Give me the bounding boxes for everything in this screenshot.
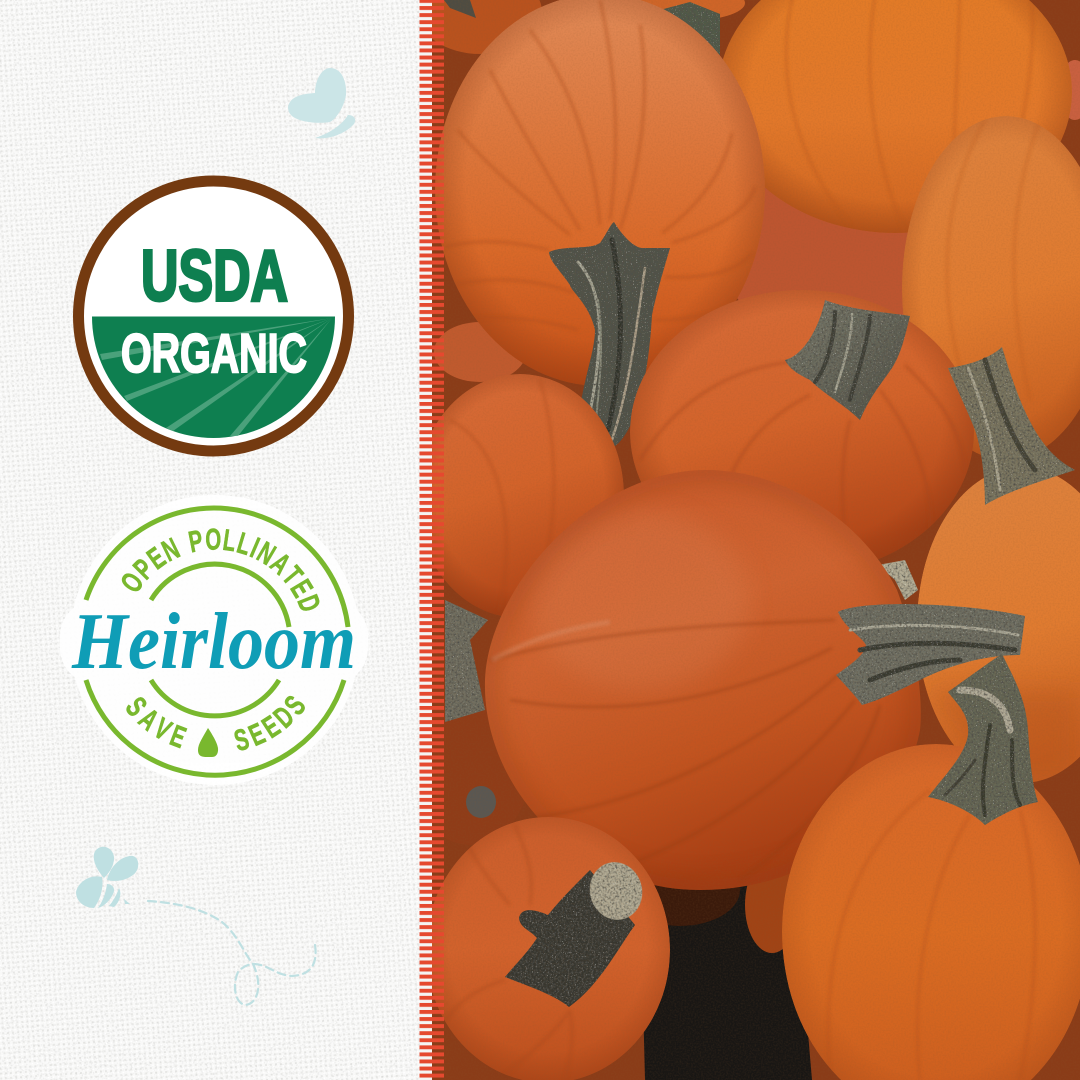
pumpkin: bottom left xyxy=(426,817,670,1080)
photo grain xyxy=(432,0,1080,1080)
badge text: SEEDS: S xyxy=(231,723,253,758)
badge text: SAVE: A xyxy=(132,703,165,737)
pumpkin: center large xyxy=(480,465,925,895)
badge text: SEEDS: D xyxy=(268,700,301,735)
badge text: OPEN POLLINATED: P xyxy=(186,525,206,559)
badge text: OPEN POLLINATED: E xyxy=(283,575,319,603)
badge text: OPEN POLLINATED: L xyxy=(221,524,238,558)
small light stone xyxy=(878,560,918,600)
photo: pile of orange pumpkins xyxy=(410,0,1080,1080)
cloth background panel xyxy=(0,0,420,1080)
stem: top left pumpkin xyxy=(549,222,670,449)
dashed flight trail xyxy=(148,901,316,1005)
seal heading: USDA: USDA xyxy=(141,236,288,316)
small top stem xyxy=(660,2,720,55)
badge text: OPEN POLLINATED: O xyxy=(115,567,151,599)
badge: USDA Organic seal xyxy=(78,181,348,451)
stem: right tall xyxy=(948,347,1075,505)
pumpkin: middle xyxy=(630,290,974,574)
badge text: SAVE xyxy=(119,691,190,755)
red stripe border xyxy=(420,0,444,1080)
badge text: SEEDS: E xyxy=(257,710,286,745)
badge text: OPEN POLLINATED: T xyxy=(275,561,309,591)
badge text: OPEN POLLINATED: D xyxy=(290,591,326,617)
icon: bee with dashed flight trail xyxy=(76,847,316,1005)
pumpkin: far right xyxy=(902,116,1080,460)
stem: left small xyxy=(445,600,488,722)
badge text: OPEN POLLINATED xyxy=(115,524,326,617)
badge text: SEEDS: E xyxy=(244,717,270,753)
icon: butterfly xyxy=(288,68,355,138)
seal heading: ORGANIC: ORGANIC xyxy=(121,322,307,384)
pumpkin: right lower xyxy=(917,467,1080,790)
stem: bottom left pumpkin xyxy=(505,870,635,1007)
badge text: SEEDS xyxy=(231,690,313,758)
bee wings and body xyxy=(76,847,138,908)
pumpkin: top left large xyxy=(435,0,765,386)
seal green field xyxy=(92,316,335,438)
pumpkin: bottom right xyxy=(782,744,1080,1080)
top left corner stem xyxy=(444,0,476,18)
badge text: SAVE: V xyxy=(148,712,177,747)
pumpkin: top right xyxy=(718,0,1072,233)
badge text: OPEN POLLINATED: N xyxy=(157,532,185,568)
badge text: OPEN POLLINATED: I xyxy=(246,532,264,564)
seal field rays xyxy=(100,318,332,436)
dark ground under pumpkins xyxy=(640,880,812,1080)
badge text: OPEN POLLINATED: A xyxy=(264,547,296,581)
icon: seed xyxy=(198,728,218,757)
badge text: OPEN POLLINATED: E xyxy=(142,542,172,576)
badge white backing xyxy=(60,495,368,785)
badge text: OPEN POLLINATED: O xyxy=(205,524,221,557)
stem: center pumpkin xyxy=(836,604,1025,705)
cut top of bottom left stem xyxy=(590,862,642,920)
badge text: OPEN POLLINATED: L xyxy=(233,527,255,562)
badge outer and inner rings xyxy=(86,508,348,775)
badge text: SAVE: S xyxy=(119,691,153,723)
badge text: SEEDS: S xyxy=(279,690,313,721)
stem: middle pumpkin xyxy=(785,300,910,420)
badge: Heirloom open pollinated xyxy=(60,495,368,785)
pumpkin: left middle xyxy=(416,374,624,618)
badge text: SAVE: E xyxy=(166,720,190,755)
badge text: OPEN POLLINATED: N xyxy=(251,536,281,572)
badge text: OPEN POLLINATED: P xyxy=(128,553,160,586)
badge script: Heirloom: Heirloom xyxy=(71,598,356,686)
stem: bottom right pumpkin xyxy=(928,654,1038,825)
back shaded pumpkins xyxy=(410,0,1080,953)
